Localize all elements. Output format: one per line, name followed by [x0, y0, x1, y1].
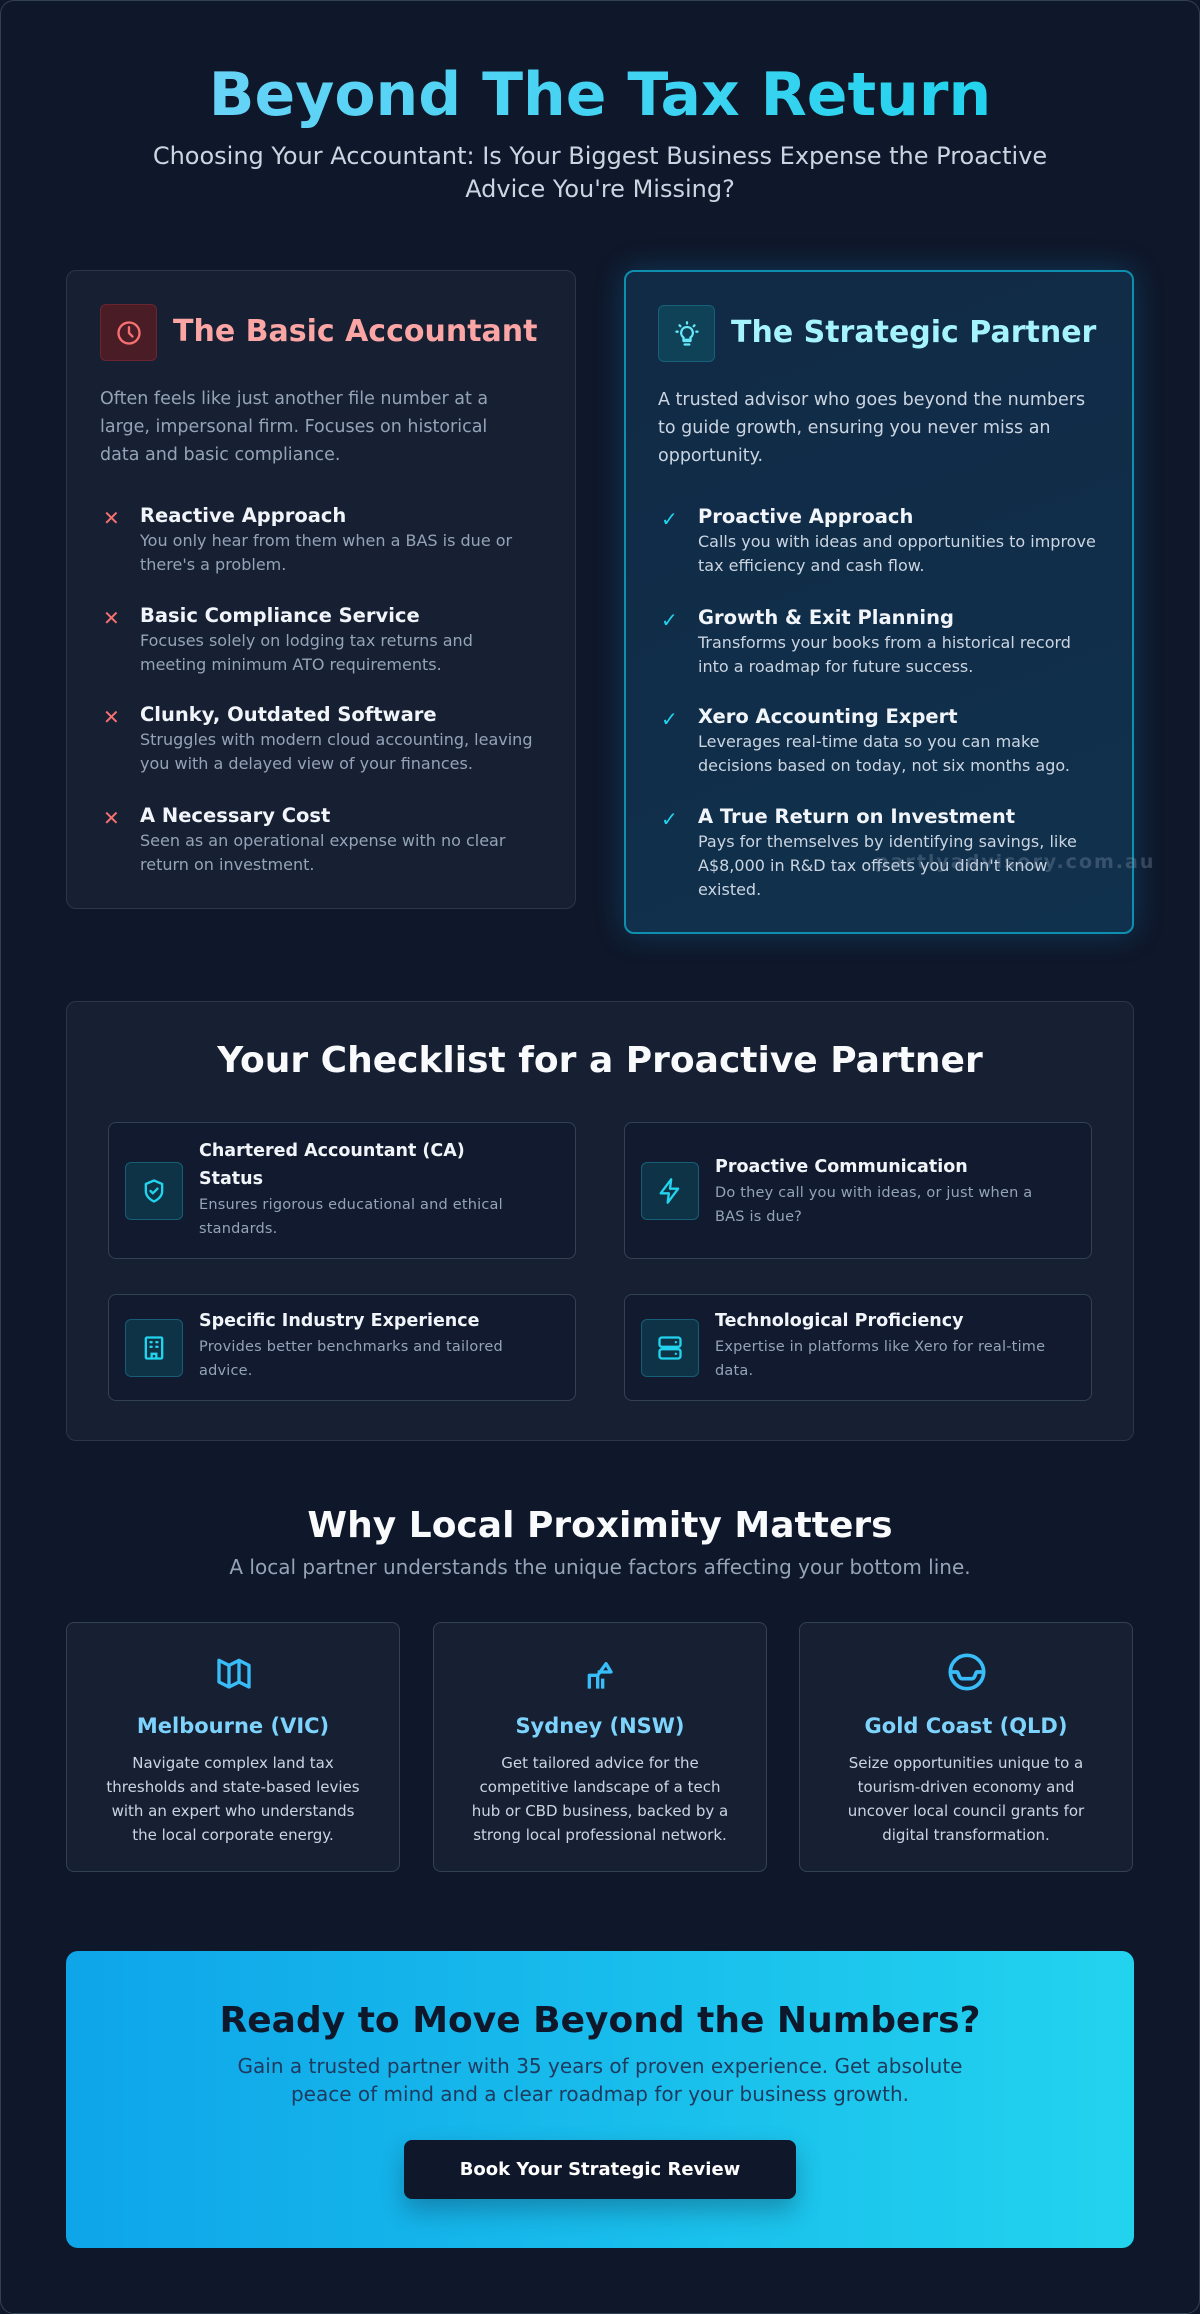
- panel: strategic partner: Leverages real-time data so you can make decisions based on today, not six months ago.: [698, 732, 1070, 775]
- panel: basic accountant: Focuses solely on lodging tax returns and meeting minimum ATO requirements.: [140, 631, 473, 674]
- panel: checklist: [66, 1001, 1134, 1441]
- check: industry: Specific Industry Experience: [199, 1311, 480, 1331]
- panel: strategic partner: [624, 270, 1134, 934]
- CTA text: Gain a trusted partner with 35 years of proven experience. Get absolute peace of mind and a clear roadmap for your business growth.: [238, 2054, 962, 2106]
- panel: basic accountant: Reactive Approach: [140, 504, 346, 527]
- panel: strategic partner: ✓: [661, 507, 678, 531]
- card: sydney: [433, 1622, 767, 1872]
- panel: strategic partner: Growth & Exit Planning: [698, 606, 954, 629]
- card: sydney: Get tailored advice for the competitive landscape of a tech hub or CBD business, backed by a strong local professional network.: [472, 1754, 728, 1844]
- panel: basic accountant: ✕: [103, 806, 120, 830]
- panel: basic accountant: Basic Compliance Service: [140, 604, 420, 627]
- heading: basic accountant: The Basic Accountant: [173, 314, 537, 349]
- check: CA status: [108, 1122, 576, 1259]
- item: reactive: [103, 504, 512, 574]
- item: xero: [661, 705, 1070, 775]
- card: sydney: Sydney (NSW): [515, 1714, 685, 1738]
- panel: strategic partner: ✓: [661, 608, 678, 632]
- item: proactive: [661, 505, 1096, 575]
- panel: strategic partner: Calls you with ideas and opportunities to improve tax efficiency and cash flow.: [698, 532, 1096, 575]
- check: industry: [108, 1294, 576, 1401]
- panel: call to action: [66, 1951, 1134, 2248]
- icon: map: [217, 1658, 251, 1689]
- item: roi: [661, 805, 1077, 899]
- card: gold coast: [799, 1622, 1133, 1872]
- subheading: A local partner understands the unique factors affecting your bottom line.: [229, 1555, 971, 1579]
- subtitle: Choosing Your Accountant: Is Your Biggest Business Expense the Proactive Advice You're Missing?: [153, 142, 1047, 203]
- card: melbourne: [66, 1622, 400, 1872]
- item: growth: [661, 606, 1071, 676]
- button: Book Your Strategic Review: [460, 2159, 740, 2180]
- panel: basic accountant: Clunky, Outdated Software: [140, 703, 437, 726]
- panel: basic accountant: You only hear from them when a BAS is due or there's a problem.: [140, 531, 512, 574]
- watermark: partlyadvisory.com.au: [875, 851, 1155, 873]
- check: technology: Technological Proficiency: [715, 1311, 964, 1331]
- heading: local proximity: Why Local Proximity Matters: [307, 1505, 893, 1546]
- check: technology: [624, 1294, 1092, 1401]
- heading: strategic partner: The Strategic Partner: [731, 315, 1096, 350]
- panel: basic accountant: ✕: [103, 606, 120, 630]
- check: communication: [624, 1122, 1092, 1259]
- check: communication: Do they call you with ideas, or just when a BAS is due?: [715, 1185, 1032, 1225]
- title: Beyond The Tax Return: [209, 60, 991, 130]
- panel: strategic partner: ✓: [661, 707, 678, 731]
- card: melbourne: Melbourne (VIC): [137, 1714, 329, 1738]
- card: gold coast: Gold Coast (QLD): [865, 1714, 1067, 1738]
- icon: lightbulb: [658, 305, 715, 362]
- panel: basic accountant: [66, 270, 576, 909]
- check: CA status: Chartered Accountant (CA) Status: [199, 1141, 465, 1189]
- panel: basic accountant: Seen as an operational expense with no clear return on investment.: [140, 831, 505, 874]
- panel: strategic partner: Pays for themselves by identifying savings, like A$8,000 in R&D tax offsets you didn't know existed.: [698, 832, 1077, 899]
- panel: strategic partner: Transforms your books from a historical record into a roadmap for future success.: [698, 633, 1071, 676]
- item: cost: [103, 804, 506, 874]
- item: compliance: [103, 604, 473, 674]
- card: gold coast: Seize opportunities unique to a tourism-driven economy and uncover local council grants for digital transformation.: [848, 1754, 1084, 1844]
- panel: strategic partner: A True Return on Investment: [698, 805, 1015, 828]
- panel: strategic partner: Proactive Approach: [698, 505, 913, 528]
- icon: clock: [100, 304, 157, 361]
- panel: strategic partner: ✓: [661, 807, 678, 831]
- description: Often feels like just another file number at a large, impersonal firm. Focuses on historical data and basic compliance.: [100, 389, 488, 465]
- check: technology: Expertise in platforms like Xero for real-time data.: [715, 1339, 1045, 1379]
- card: melbourne: Navigate complex land tax thresholds and state-based levies with an expert who understands the local corporate energy.: [106, 1754, 360, 1844]
- heading: checklist: Your Checklist for a Proactive Partner: [217, 1040, 983, 1081]
- description: A trusted advisor who goes beyond the numbers to guide growth, ensuring you never miss an opportunity.: [658, 390, 1085, 466]
- panel: basic accountant: ✕: [103, 705, 120, 729]
- panel: strategic partner: Xero Accounting Expert: [698, 705, 958, 728]
- item: software: [103, 703, 532, 773]
- check: communication: Proactive Communication: [715, 1157, 968, 1177]
- icon: wave: [948, 1654, 986, 1690]
- panel: basic accountant: A Necessary Cost: [140, 804, 330, 827]
- panel: basic accountant: Struggles with modern cloud accounting, leaving you with a delayed view of your finances.: [140, 730, 532, 773]
- panel: basic accountant: ✕: [103, 506, 120, 530]
- check: CA status: Ensures rigorous educational and ethical standards.: [199, 1197, 503, 1237]
- CTA heading: Ready to Move Beyond the Numbers?: [220, 2000, 980, 2041]
- icon: opera house: [588, 1662, 613, 1689]
- button: [404, 2140, 796, 2199]
- check: industry: Provides better benchmarks and tailored advice.: [199, 1339, 503, 1379]
